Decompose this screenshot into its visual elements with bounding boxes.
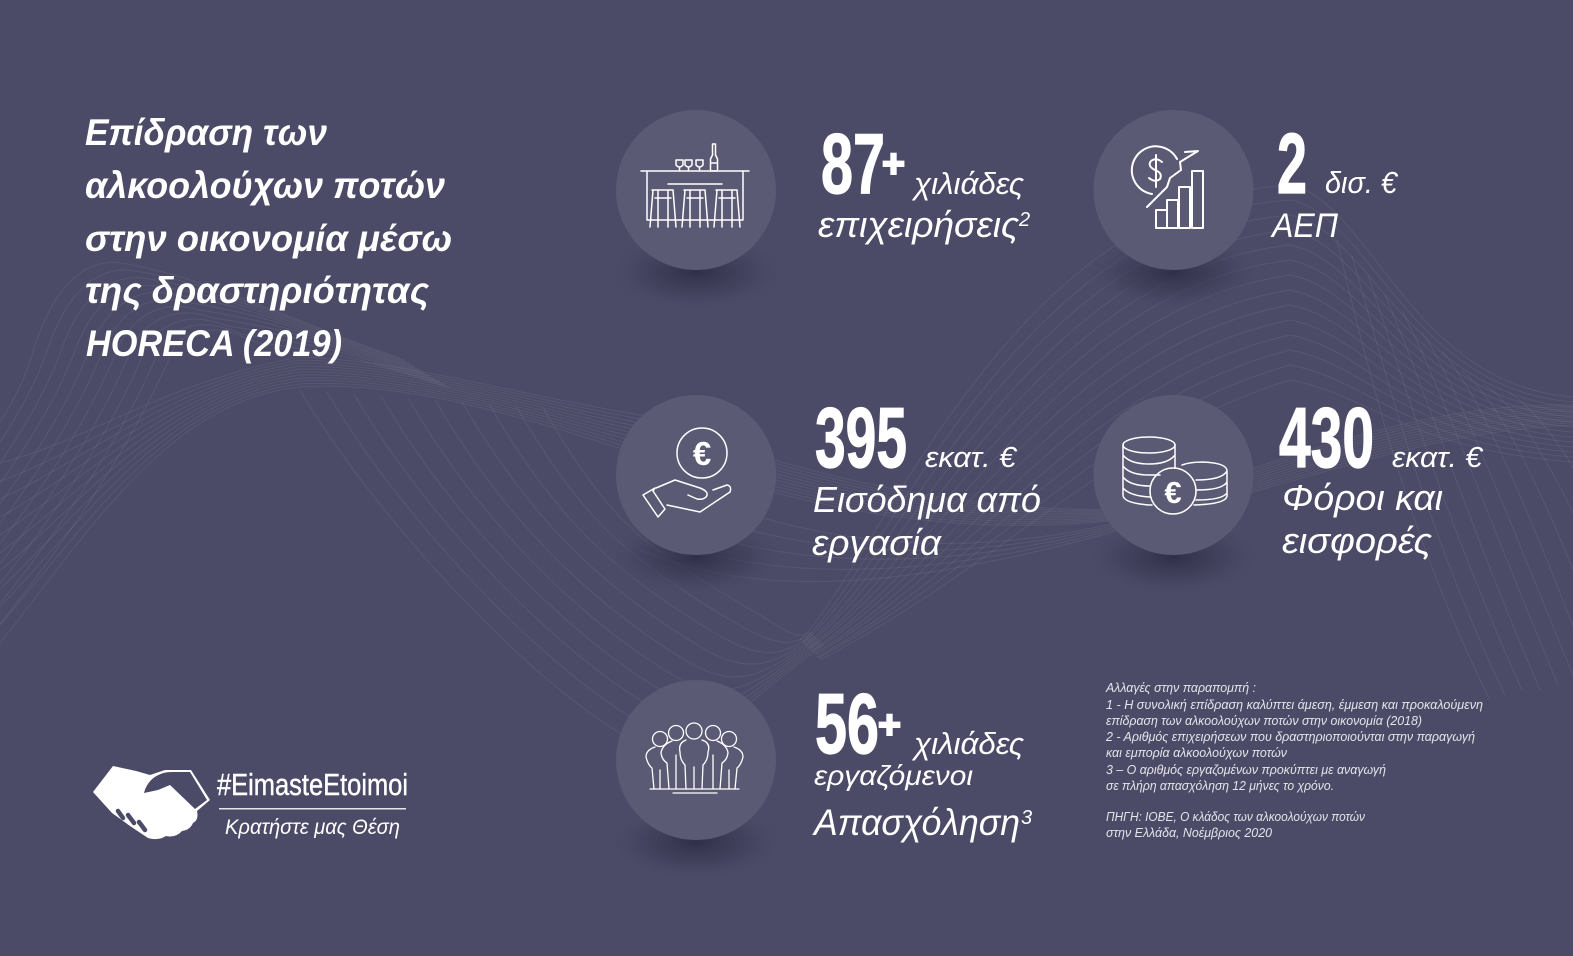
icon: coin stacks with euro: € <box>1164 475 1182 510</box>
value: 87+ thousand businesses: χιλιάδες <box>911 166 1024 201</box>
footnotes and source: και εμπορία αλκοολούχων ποτών <box>1106 746 1288 760</box>
value: 56+ thousand employees: 3 <box>1021 807 1032 829</box>
icon: group of people <box>646 723 743 793</box>
icon: dollar coin and rising bar chart <box>1132 146 1203 228</box>
logo: EimasteEtoimoi campaign: Κρατήστε μας Θέση <box>225 816 400 839</box>
icon: hand holding euro coin: € <box>693 435 711 472</box>
value: 2 billion euro GDP: 2 <box>1277 117 1307 212</box>
value: 56+ thousand employees: χιλιάδες <box>911 726 1024 761</box>
icon: bar counter with stools <box>641 144 749 227</box>
value: 395 million euro labour income: 395 <box>815 391 907 486</box>
footnotes and source: 2 - Αριθμός επιχειρήσεων που δραστηριοποιούνται στην παραγωγή <box>1105 730 1475 744</box>
footnotes and source: 1 - Η συνολική επίδραση καλύπτει άμεση, έμμεση και προκαλούμενη <box>1106 698 1483 712</box>
value: 395 million euro labour income: εργασία <box>812 522 943 563</box>
value: 395 million euro labour income <box>812 391 1041 563</box>
panel: taxes stat <box>1081 391 1484 597</box>
value: 56+ thousand employees <box>812 677 1032 843</box>
footnotes and source: Αλλαγές στην παραπομπή : <box>1105 681 1256 695</box>
value: 56+ thousand employees: + <box>878 703 901 747</box>
footnotes and source: 3 – Ο αριθμός εργαζομένων προκύπτει με αναγωγή <box>1106 763 1386 777</box>
value: 430 million euro taxes: εκατ. € <box>1392 442 1484 474</box>
icon: handshake <box>93 766 210 839</box>
value: 87+ thousand businesses: 87 <box>821 117 885 212</box>
panel: employment stat <box>604 677 1032 882</box>
title <box>85 112 452 364</box>
icon: coin stacks with euro <box>1123 437 1227 514</box>
footnotes and source: σε πλήρη απασχόληση 12 μήνες το χρόνο. <box>1106 779 1334 793</box>
panel: businesses stat <box>604 110 1030 312</box>
footnotes and source <box>1105 681 1483 840</box>
footnotes and source: στην Ελλάδα, Νοέμβριος 2020 <box>1106 826 1272 840</box>
logo: EimasteEtoimoi campaign: #EimasteEtoimoi <box>217 767 408 802</box>
panel: GDP stat <box>1081 110 1399 312</box>
value: 395 million euro labour income: Εισόδημα από <box>813 479 1041 520</box>
value: 56+ thousand employees: 56 <box>815 677 879 772</box>
panel: labour income stat <box>604 391 1041 597</box>
value: 395 million euro labour income: εκατ. € <box>925 442 1018 474</box>
footnotes and source: επίδραση των αλκοολούχων ποτών στην οικονομία (2018) <box>1106 714 1422 728</box>
value: 430 million euro taxes: εισφορές <box>1282 520 1433 561</box>
value: 2 billion euro GDP <box>1270 117 1399 245</box>
value: 56+ thousand employees: Απασχόληση <box>812 802 1020 843</box>
value: 2 billion euro GDP: ΑΕΠ <box>1270 207 1338 245</box>
title: στην οικονομία μέσω <box>85 218 452 259</box>
icon: hand holding euro coin <box>643 428 731 517</box>
title: της δραστηριότητας <box>85 270 429 311</box>
value: 430 million euro taxes: Φόροι και <box>1282 477 1443 518</box>
value: 430 million euro taxes <box>1279 391 1484 561</box>
value: 87+ thousand businesses: 2 <box>1018 209 1030 231</box>
value: 56+ thousand employees: εργαζόμενοι <box>814 760 973 791</box>
value: 87+ thousand businesses: + <box>882 142 905 186</box>
title: αλκοολούχων ποτών <box>85 165 445 206</box>
title: HORECA (2019) <box>86 323 342 364</box>
value: 430 million euro taxes: 430 <box>1279 391 1374 486</box>
logo: EimasteEtoimoi campaign <box>93 766 408 839</box>
value: 87+ thousand businesses <box>818 117 1030 245</box>
title: Επίδραση των <box>85 112 327 153</box>
value: 2 billion euro GDP: δισ. € <box>1325 165 1399 200</box>
value: 87+ thousand businesses: επιχειρήσεις <box>818 204 1020 245</box>
footnotes and source: ΠΗΓΗ: ΙΟΒΕ, Ο κλάδος των αλκοολούχων ποτών <box>1106 810 1366 824</box>
